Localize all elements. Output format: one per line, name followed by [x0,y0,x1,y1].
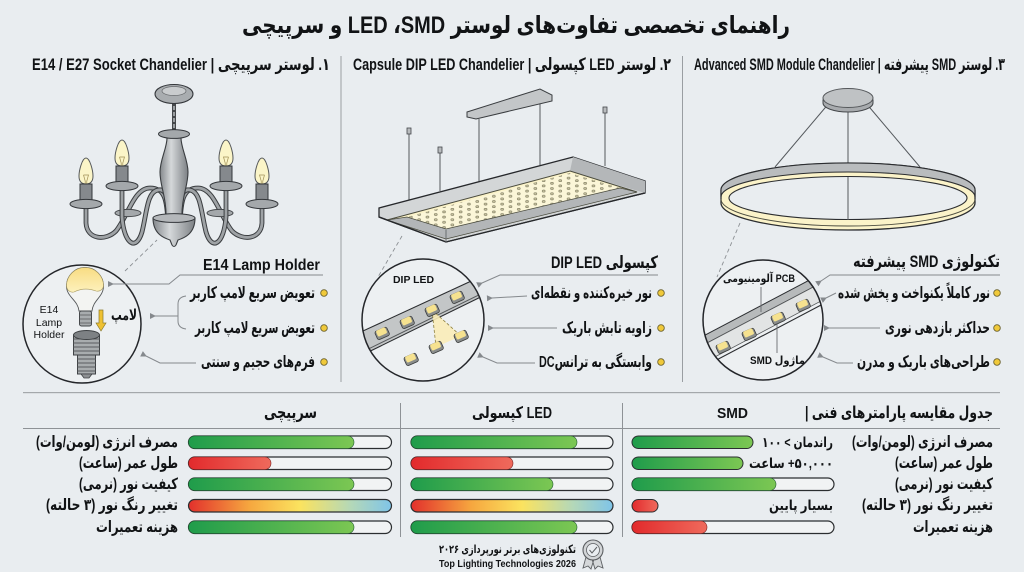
left row labels: تغییر رنگ نور (۳ حالته) [46,496,178,514]
subheading: E14 lamp holder: E14 Lamp Holder [203,257,320,274]
bullet list: نور خیره‌کننده و نقطه‌ای [531,285,652,302]
bullet list: وابستگی به ترانسDC [539,352,652,371]
column header: SMD: SMD [717,405,748,422]
bullet list: تعویض سریع لامپ کاربر [194,320,315,338]
bullet list: زاویه تابش باریک [562,320,652,337]
left row labels: کیفیت نور (نرمی) [79,476,179,493]
dashed connector [717,223,740,277]
column header: LED capsule: LED کپسولی [472,405,552,423]
bars: SMD column: راندمان > ۱۰۰ [762,434,833,450]
footer Persian line: تکنولوژی‌های برتر نورپردازی ۲۰۲۶ [439,544,576,557]
panel: socket chandelier [23,55,330,383]
icon: ring chandelier [721,88,975,230]
LED chips [374,291,469,366]
detail circle: lamp holder [23,265,141,383]
left row labels: هزینه تعمیرات [96,519,178,536]
icon: bulb [66,268,104,326]
bullet list [531,285,664,371]
bullet list: فرم‌های حجیم و سنتی [201,354,315,371]
label: E14 lamp holder [34,304,65,341]
icon: down arrow [96,310,106,331]
subheading: advanced SMD technology: تکنولوژی SMD پیشرفته [853,252,1000,272]
label: SMD module: ماژول SMD [750,355,805,367]
left row labels: مصرف انرژی (لومن/وات) [36,434,178,451]
title: راهنمای تخصصی تفاوت‌های لوستر SMD،‏ LED و سرپیچی [242,12,790,39]
bars: SMD column: ۵۰,۰۰۰+ ساعت [749,455,833,471]
label: E14 lamp holder: E14 [40,304,58,316]
icon: socket [74,330,100,378]
bars: SMD column: بسیار پایین [769,497,833,514]
left row labels [36,434,179,536]
SMD chips [715,299,811,354]
label: DIP LED: DIP LED [393,274,434,286]
callout arrows [821,275,1000,363]
panel: capsule DIP LED chandelier [350,55,671,381]
bars: SMD column [632,434,834,534]
panel: advanced SMD chandelier [690,55,1005,380]
detail circle: SMD strip [702,259,824,381]
right row labels: هزینه تعمیرات [913,519,993,536]
heading: socket chandelier: ۱. لوستر سرپیچی | E14 / E27 Socket Chandelier [32,55,330,75]
label: E14 lamp holder: Lamp [36,317,62,329]
footer English line: Top Lighting Technologies 2026 [439,558,576,570]
bullet list [189,285,327,371]
bullet list: تعویض سریع لامپ کاربر [189,285,315,303]
bars: socket column [188,436,392,534]
right row labels: تغییر رنگ نور (۳ حالته) [862,496,993,514]
comparison table [23,403,1000,537]
label: lamp: لامپ [111,307,137,324]
bullet list [838,282,1000,371]
callout arrows [482,275,658,363]
dashed connector [378,236,402,277]
subheading: capsule DIP LED: کپسولی DIP LED [551,253,658,273]
column header: socket: سرپیچی [264,403,317,423]
detail circle: DIP LED [361,258,485,382]
right row labels [852,434,994,536]
heading: SMD chandelier: ۳. لوستر SMD پیشرفته | Advanced SMD Module Chandelier [694,55,1005,75]
left row labels: طول عمر (ساعت) [79,455,178,472]
icon: suspended LED panel [379,89,645,242]
label: aluminium PCB: PCB آلومینیومی [723,271,795,285]
bars: LED capsule column [411,436,613,534]
dashed connector [125,240,157,271]
footer [439,540,603,570]
icon: chandelier [70,84,278,246]
heading: DIP LED chandelier: ۲. لوستر LED کپسولی | Capsule DIP LED Chandelier [353,55,671,75]
label: E14 lamp holder: Holder [34,329,65,341]
callout arrows [113,275,323,363]
icon: award medal [583,540,603,569]
